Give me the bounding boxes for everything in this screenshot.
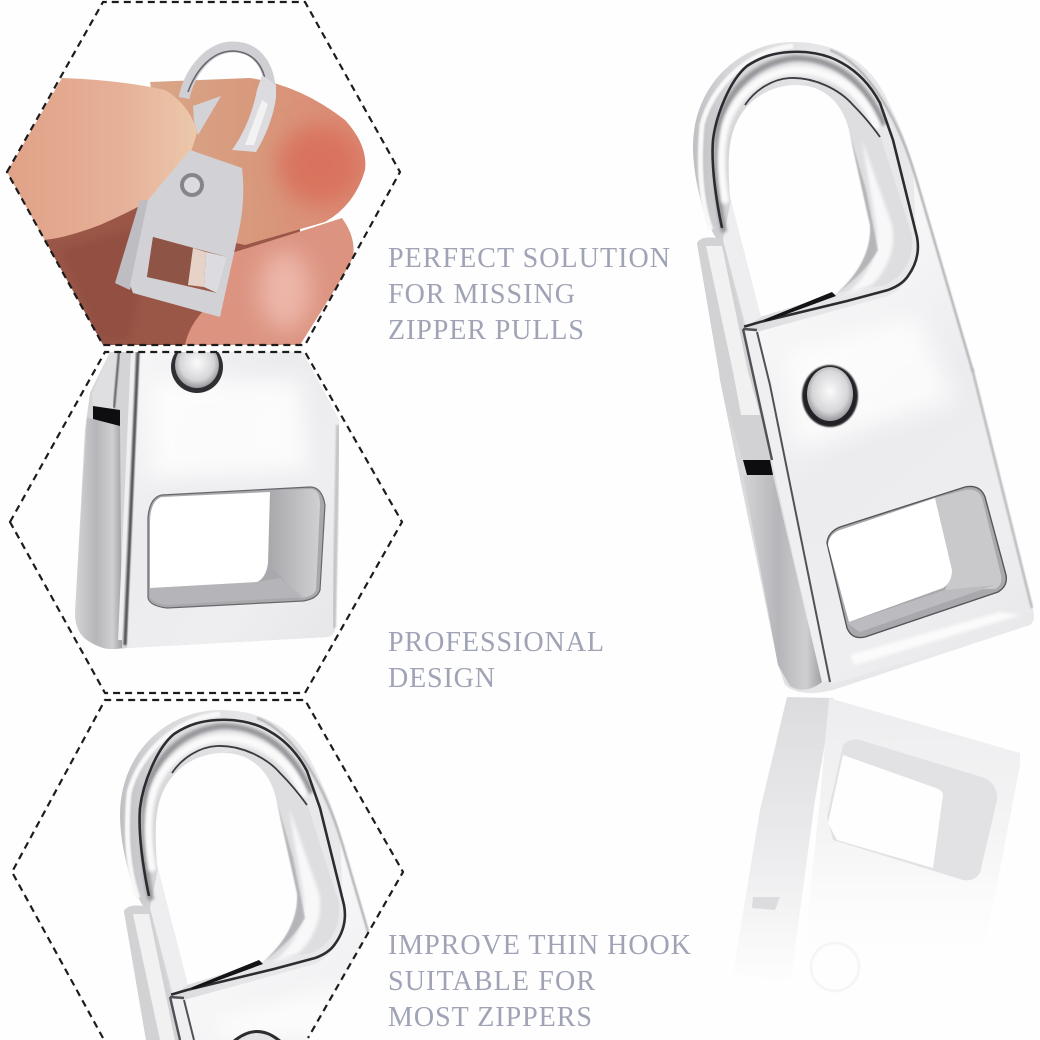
text block: perfect solution: ZIPPER PULLS	[388, 315, 584, 346]
reflected notch	[752, 897, 780, 910]
face sheen	[150, 380, 310, 480]
metal body	[75, 352, 339, 649]
hinge lines	[120, 352, 133, 640]
reflected rail	[733, 697, 833, 985]
zipper in hand	[115, 47, 276, 317]
panel: hexagon hand photo	[7, 47, 365, 345]
rivet	[171, 352, 223, 393]
red fingertip tint	[278, 125, 362, 205]
thumb	[7, 78, 197, 240]
dashed hexagon 3	[12, 700, 403, 1038]
panel: hexagon close-up of hook	[120, 710, 370, 1040]
text block: perfect solution	[388, 243, 670, 346]
text block: professional design	[388, 627, 604, 694]
reflected window	[827, 740, 997, 880]
reflected rivet	[811, 943, 859, 991]
lower finger	[185, 218, 354, 345]
rail	[75, 418, 122, 649]
panel: hexagon close-up of pull base	[75, 341, 339, 649]
dashed hexagon 2	[10, 352, 402, 693]
reflected face	[800, 698, 1020, 985]
text block: improve thin hook: SUITABLE FOR	[388, 966, 595, 997]
text block: improve thin hook: MOST ZIPPERS	[388, 1002, 592, 1033]
notch	[93, 406, 120, 426]
window	[148, 487, 325, 608]
zipper hook close-up	[120, 710, 370, 1040]
text block: perfect solution: PERFECT SOLUTION	[388, 243, 670, 274]
text block: improve thin hook: IMPROVE THIN HOOK	[388, 930, 691, 961]
text block: improve thin hook	[388, 930, 691, 1033]
face	[127, 352, 339, 648]
text block: professional design: PROFESSIONAL	[388, 627, 604, 658]
back finger	[150, 78, 365, 245]
reflection	[733, 697, 1020, 991]
main zipper pull	[693, 42, 1034, 693]
dashed hexagon 1	[7, 2, 400, 345]
lower finger highlight	[259, 250, 311, 330]
finger shadow area	[20, 180, 300, 345]
dark underside	[71, 239, 129, 334]
text block: professional design: DESIGN	[388, 663, 495, 694]
text block: perfect solution: FOR MISSING	[388, 279, 575, 310]
